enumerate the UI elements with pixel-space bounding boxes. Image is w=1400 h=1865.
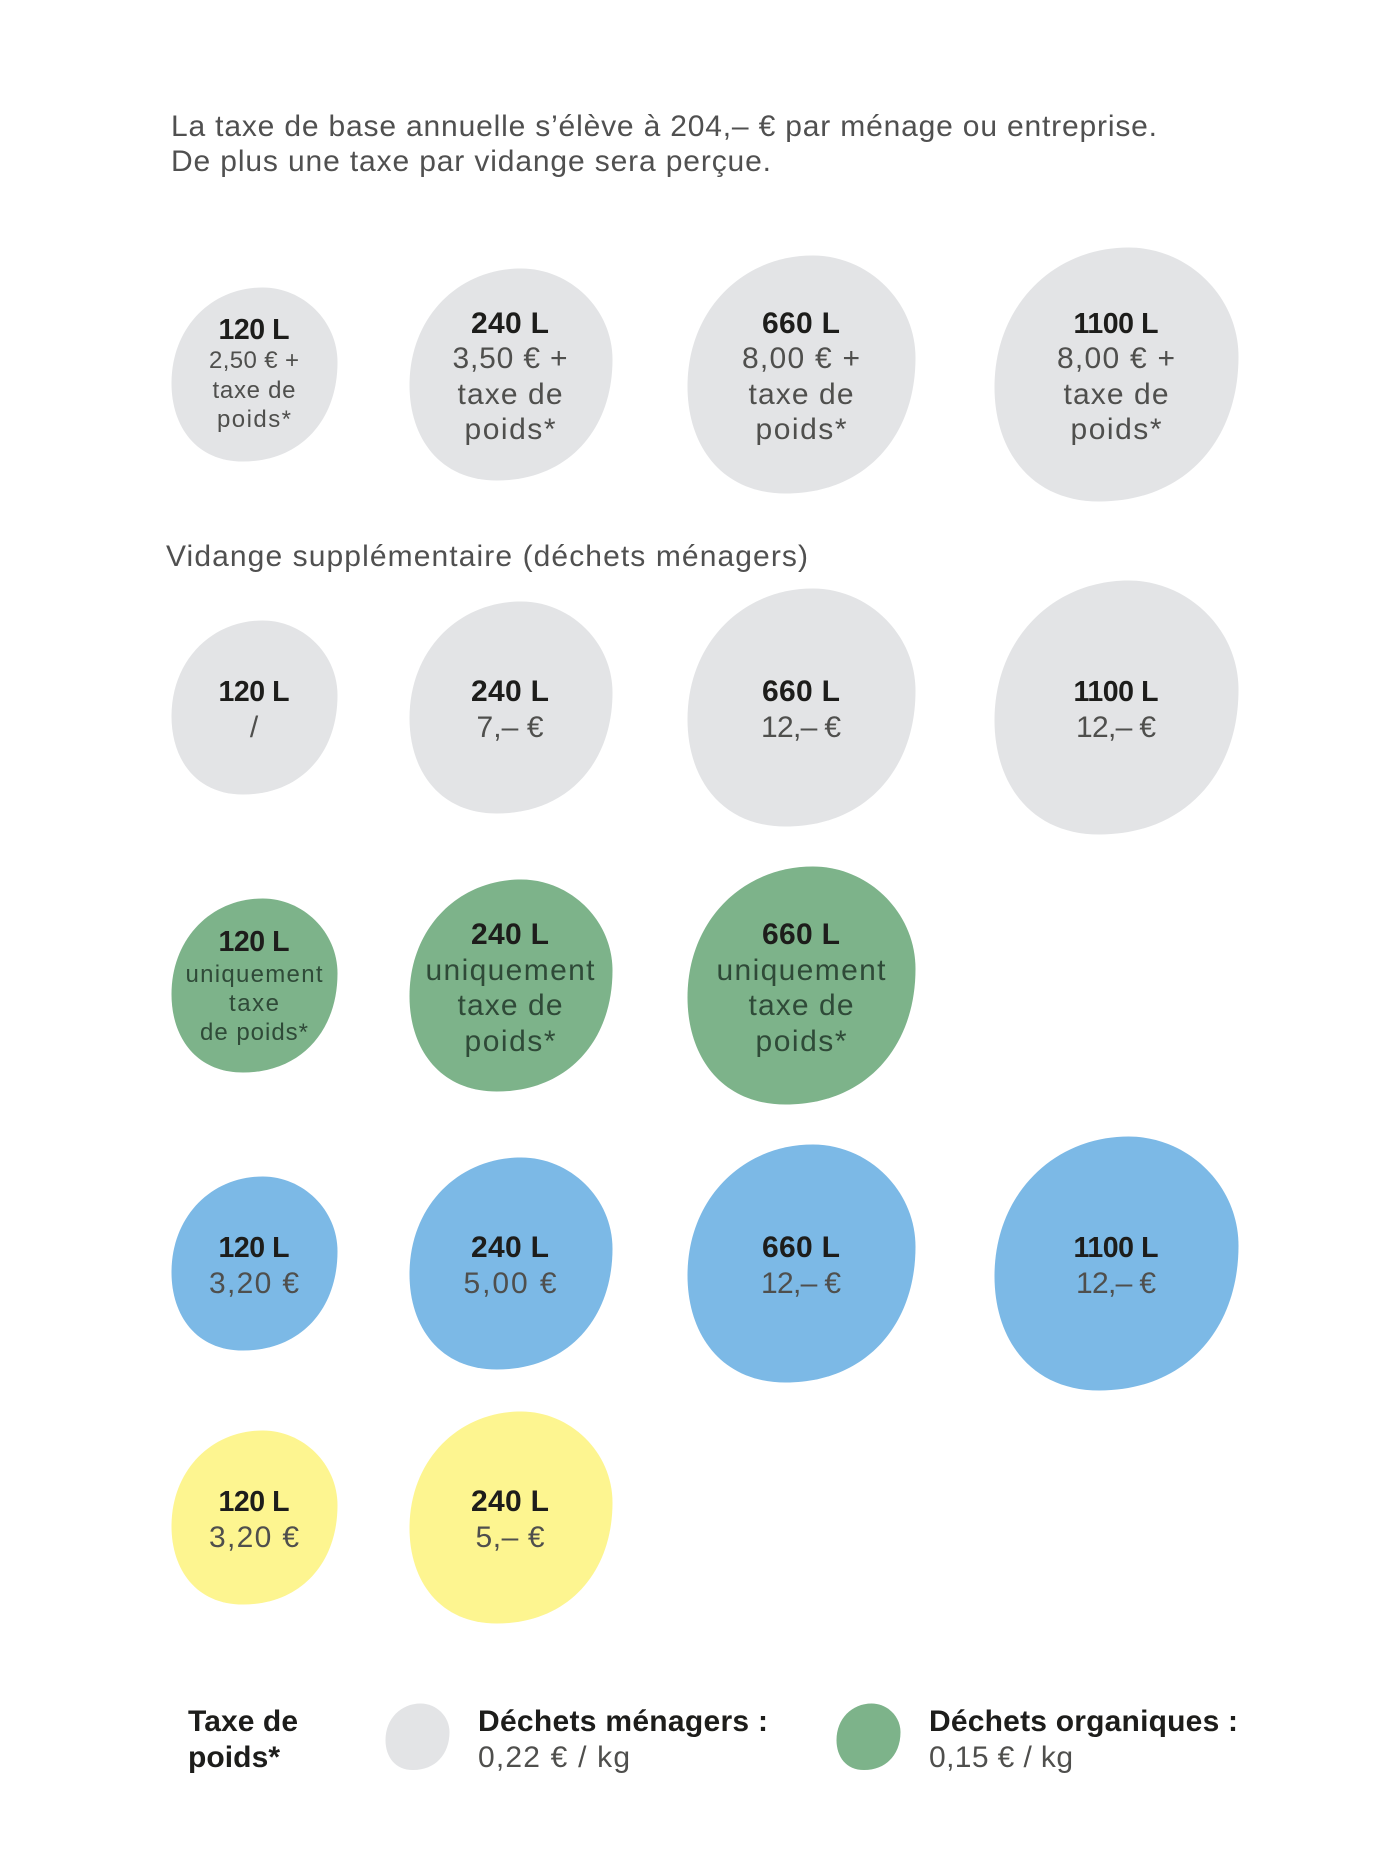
- blob: 120 L organic: 120 L: [218, 926, 290, 958]
- blob: 1100 L additional: [994, 580, 1238, 834]
- blob: 1100 L base fee: taxe de: [1064, 378, 1168, 411]
- blob: 120 L additional: /: [250, 711, 259, 744]
- blob: 1100 L blue: 12,– €: [1076, 1267, 1156, 1300]
- blob: 240 L additional: 240 L: [471, 675, 549, 708]
- panel: organic waste row: [172, 866, 916, 1104]
- blob: 120 L base fee: taxe de: [212, 377, 296, 404]
- panel: additional emptying row: [172, 580, 1238, 834]
- blob: 240 L additional: 7,– €: [476, 711, 544, 744]
- blob: 120 L additional: 120 L: [218, 676, 290, 708]
- legend: weight tax: [188, 1704, 1238, 1774]
- blob: 660 L additional: [688, 588, 916, 826]
- intro text: De plus une taxe par vidange sera perçue.: [171, 145, 771, 178]
- blob: 1100 L base fee: 8,00 € +: [1057, 342, 1175, 375]
- blob: 120 L base fee: 120 L: [218, 314, 290, 346]
- panel: yellow bin row: [172, 1412, 612, 1624]
- blob: 240 L base fee: [410, 268, 612, 480]
- blob: 120 L base fee: poids*: [217, 406, 291, 433]
- panel: base emptying fees row: [172, 248, 1238, 502]
- blob: 120 L organic: taxe: [229, 990, 279, 1017]
- blob: 240 L base fee: 240 L: [471, 307, 549, 340]
- blob: 120 L organic: [172, 898, 338, 1072]
- blob: 660 L additional: 660 L: [762, 675, 840, 708]
- legend: household waste rate: Déchets ménagers :: [478, 1705, 768, 1738]
- blob: 240 L blue: [410, 1158, 612, 1370]
- blob: 1100 L base fee: 1100 L: [1074, 308, 1158, 340]
- blob: 240 L blue: 5,00 €: [464, 1267, 557, 1300]
- legend: organic waste rate: Déchets organiques :: [929, 1705, 1238, 1738]
- blob: 660 L base fee: 660 L: [762, 307, 840, 340]
- blob: 660 L additional: 12,– €: [761, 711, 841, 744]
- blob: 240 L additional: [410, 602, 612, 814]
- blob: 1100 L additional: 1100 L: [1074, 676, 1158, 708]
- blob: 1100 L blue: 1100 L: [1074, 1232, 1158, 1264]
- blob: 240 L yellow: 240 L: [471, 1485, 549, 1518]
- blob: 660 L base fee: 8,00 € +: [742, 342, 860, 375]
- blob: 1100 L base fee: poids*: [1070, 413, 1162, 446]
- blob: 120 L organic: uniquement: [186, 961, 323, 988]
- legend: organic waste rate: 0,15 € / kg: [929, 1741, 1073, 1774]
- blob: 660 L blue: 12,– €: [761, 1267, 841, 1300]
- blob: 240 L base fee: poids*: [464, 413, 556, 446]
- legend: household waste rate: [478, 1705, 768, 1774]
- blob: 120 L blue: 120 L: [218, 1232, 290, 1264]
- blob: 240 L organic: 240 L: [471, 918, 549, 951]
- panel: blue bin row: [172, 1136, 1238, 1390]
- blob: 120 L yellow: 3,20 €: [209, 1521, 299, 1554]
- blob: 120 L yellow: [172, 1430, 338, 1604]
- blob: 240 L blue: 240 L: [471, 1231, 549, 1264]
- blob: 660 L blue: 660 L: [762, 1231, 840, 1264]
- blob: 1100 L base fee: [994, 248, 1238, 502]
- blob: 240 L organic: uniquement: [426, 954, 595, 987]
- blob: 120 L yellow: 120 L: [218, 1486, 290, 1518]
- blob: 660 L organic: [688, 866, 916, 1104]
- blob: 240 L organic: [410, 880, 612, 1092]
- blob: 660 L base fee: taxe de: [748, 378, 854, 411]
- blob: 120 L organic: de poids*: [200, 1019, 308, 1046]
- legend: organic waste rate: [929, 1705, 1238, 1774]
- legend: household waste swatch: [386, 1704, 450, 1770]
- blob: 240 L yellow: [410, 1412, 612, 1624]
- legend: household waste rate: 0,22 € / kg: [478, 1741, 630, 1774]
- blob: 660 L organic: poids*: [756, 1025, 847, 1058]
- legend title: poids*: [188, 1741, 280, 1774]
- blob: 1100 L additional: 12,– €: [1076, 711, 1156, 744]
- blob: 240 L base fee: 3,50 € +: [452, 342, 568, 375]
- blob: 660 L base fee: poids*: [756, 413, 847, 446]
- heading: additional emptying: Vidange supplémentaire (déchets ménagers): [166, 540, 808, 573]
- blob: 120 L base fee: [172, 288, 338, 462]
- blob: 120 L blue: [172, 1176, 338, 1350]
- blob: 1100 L blue: [994, 1136, 1238, 1390]
- blob: 240 L organic: taxe de: [458, 989, 562, 1022]
- blob: 660 L organic: taxe de: [748, 989, 854, 1022]
- blob: 660 L blue: [688, 1144, 916, 1382]
- blob: 120 L blue: 3,20 €: [209, 1267, 299, 1300]
- blob: 660 L base fee: [688, 256, 916, 494]
- intro text: La taxe de base annuelle s’élève à 204,– € par ménage ou entreprise.: [171, 110, 1157, 143]
- blob: 660 L organic: 660 L: [762, 918, 840, 951]
- blob: 240 L yellow: 5,– €: [476, 1521, 545, 1554]
- legend title: [188, 1705, 298, 1774]
- blob: 120 L additional: [172, 620, 338, 794]
- legend title: Taxe de: [188, 1705, 298, 1738]
- blob: 240 L organic: poids*: [464, 1025, 556, 1058]
- intro text: [171, 110, 1157, 178]
- blob: 660 L organic: uniquement: [716, 954, 886, 987]
- blob: 120 L base fee: 2,50 € +: [209, 347, 299, 374]
- blob: 240 L base fee: taxe de: [458, 378, 562, 411]
- legend: organic waste swatch: [836, 1704, 900, 1770]
